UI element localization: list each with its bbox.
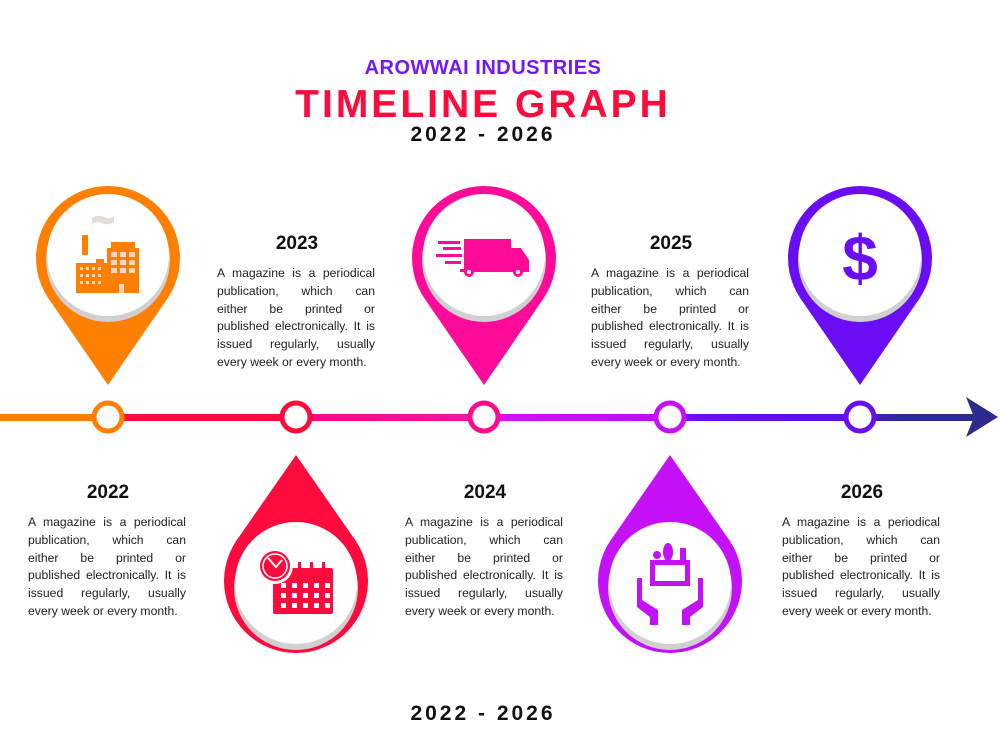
text 2024: either be printed or bbox=[405, 551, 563, 565]
pin 2024: truck bbox=[412, 186, 556, 385]
text 2024: every week or every month. bbox=[405, 604, 555, 618]
text 2023: either be printed or bbox=[217, 302, 375, 316]
timeline markers bbox=[94, 403, 874, 431]
text 2025 bbox=[591, 266, 749, 369]
date range bottom: 2022 - 2026 bbox=[410, 702, 556, 725]
year 2026: 2026 bbox=[841, 482, 883, 503]
text 2026: published electronically. It is bbox=[782, 568, 940, 582]
text 2023: every week or every month. bbox=[217, 355, 367, 369]
text 2022: published electronically. It is bbox=[28, 568, 186, 582]
pin 2026: dollar bbox=[788, 186, 932, 385]
text 2025: publication, which can bbox=[591, 284, 749, 298]
text 2026 bbox=[782, 515, 940, 618]
text 2024: issued regularly, usually bbox=[405, 586, 563, 600]
text 2022: either be printed or bbox=[28, 551, 186, 565]
icon: calendar clock bbox=[257, 548, 333, 614]
block 2022 bbox=[28, 482, 186, 618]
year 2024: 2024 bbox=[464, 482, 506, 503]
year 2022: 2022 bbox=[87, 482, 129, 503]
icon: truck bbox=[436, 239, 529, 277]
year 2023: 2023 bbox=[276, 233, 318, 254]
icon: factory bbox=[76, 216, 139, 293]
text 2025: published electronically. It is bbox=[591, 319, 749, 333]
text 2023: issued regularly, usually bbox=[217, 337, 375, 351]
pin 2023: calendar bbox=[224, 455, 368, 653]
year 2025: 2025 bbox=[650, 233, 692, 254]
icon: hands with box bbox=[637, 543, 703, 625]
text 2023: published electronically. It is bbox=[217, 319, 375, 333]
block 2023 bbox=[217, 233, 375, 369]
date range top: 2022 - 2026 bbox=[410, 123, 556, 146]
text 2026: A magazine is a periodical bbox=[782, 515, 940, 529]
text 2026: either be printed or bbox=[782, 551, 940, 565]
text 2023 bbox=[217, 266, 375, 369]
text 2024: A magazine is a periodical bbox=[405, 515, 563, 529]
text 2026: every week or every month. bbox=[782, 604, 932, 618]
text 2022: every week or every month. bbox=[28, 604, 178, 618]
timeline axis with arrow bbox=[0, 397, 998, 437]
text 2025: either be printed or bbox=[591, 302, 749, 316]
text 2026: publication, which can bbox=[782, 533, 940, 547]
block 2024 bbox=[405, 482, 563, 618]
icon: dollar sign: $ bbox=[842, 222, 878, 294]
text 2022 bbox=[28, 515, 186, 618]
text 2022: issued regularly, usually bbox=[28, 586, 186, 600]
text 2025: issued regularly, usually bbox=[591, 337, 749, 351]
block 2026 bbox=[782, 482, 940, 618]
text 2025: A magazine is a periodical bbox=[591, 266, 749, 280]
pin 2022: factory bbox=[36, 186, 180, 385]
block 2025 bbox=[591, 233, 749, 369]
subtitle: company: AROWWAI INDUSTRIES bbox=[365, 57, 601, 79]
text 2024 bbox=[405, 515, 563, 618]
text 2022: A magazine is a periodical bbox=[28, 515, 186, 529]
text 2023: publication, which can bbox=[217, 284, 375, 298]
text 2023: A magazine is a periodical bbox=[217, 266, 375, 280]
title: TIMELINE GRAPH bbox=[295, 83, 671, 126]
text 2025: every week or every month. bbox=[591, 355, 741, 369]
text 2022: publication, which can bbox=[28, 533, 186, 547]
text 2024: published electronically. It is bbox=[405, 568, 563, 582]
text 2026: issued regularly, usually bbox=[782, 586, 940, 600]
pin 2025: hands with box bbox=[598, 455, 742, 653]
text 2024: publication, which can bbox=[405, 533, 563, 547]
